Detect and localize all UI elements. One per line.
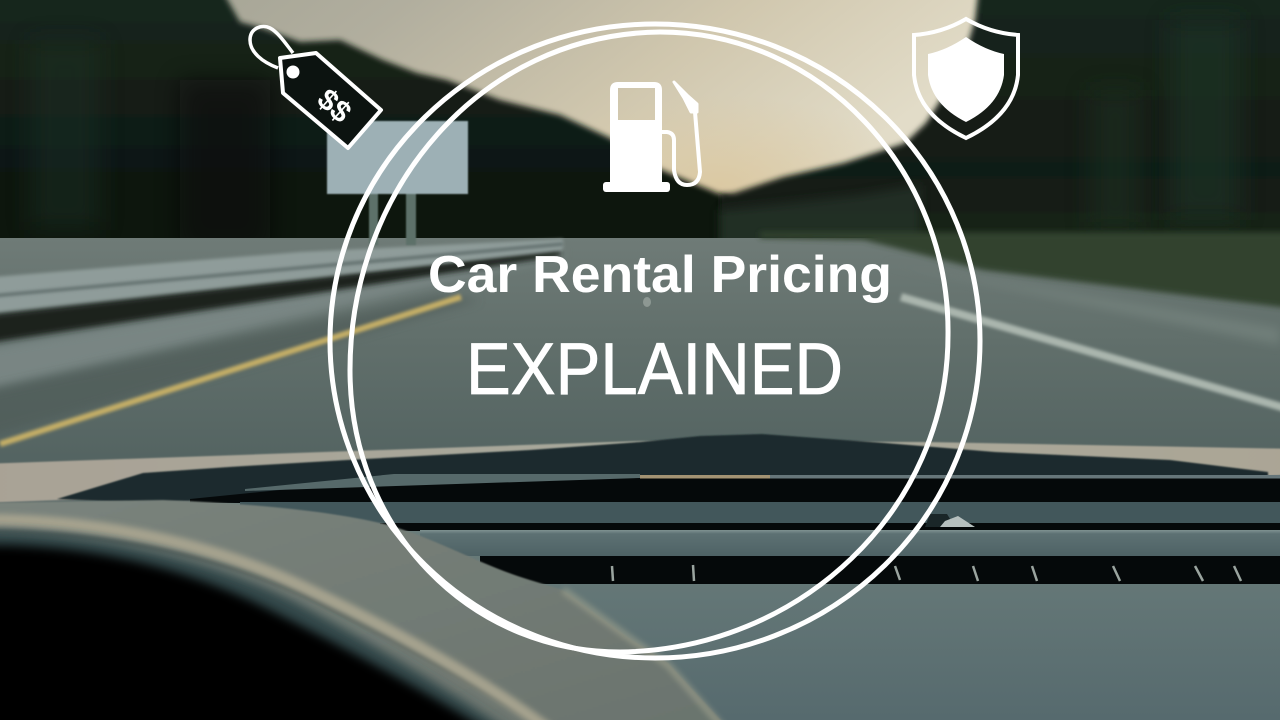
dashboard left hood	[0, 500, 730, 720]
dashboard right	[200, 500, 1280, 720]
white line right	[901, 297, 1280, 408]
trees: right	[720, 0, 1280, 262]
billboard	[327, 121, 468, 245]
subtitle: EXPLAINED: EXPLAINED	[466, 329, 843, 410]
road	[0, 238, 1280, 468]
title: Car Rental Pricing: Car Rental Pricing	[428, 246, 892, 304]
icon: shield	[914, 19, 1018, 138]
guard rail	[0, 239, 563, 392]
road spot	[643, 297, 651, 307]
wiper	[57, 434, 1280, 503]
steering wheel	[0, 520, 574, 720]
dashboard vents	[240, 502, 1280, 584]
darker lane left	[0, 296, 480, 440]
grass verge	[760, 232, 1280, 312]
icon: price tag	[250, 26, 381, 148]
icon: price tag: $$	[311, 83, 358, 130]
trees: left	[0, 0, 735, 260]
yellow line	[0, 297, 461, 444]
road shoulder right	[880, 262, 1280, 345]
double circle ring	[330, 24, 980, 658]
sky	[0, 0, 1280, 275]
dashboard crease highlight	[563, 590, 725, 720]
icon: fuel pump	[603, 82, 700, 192]
windshield reflection band	[0, 441, 1280, 503]
